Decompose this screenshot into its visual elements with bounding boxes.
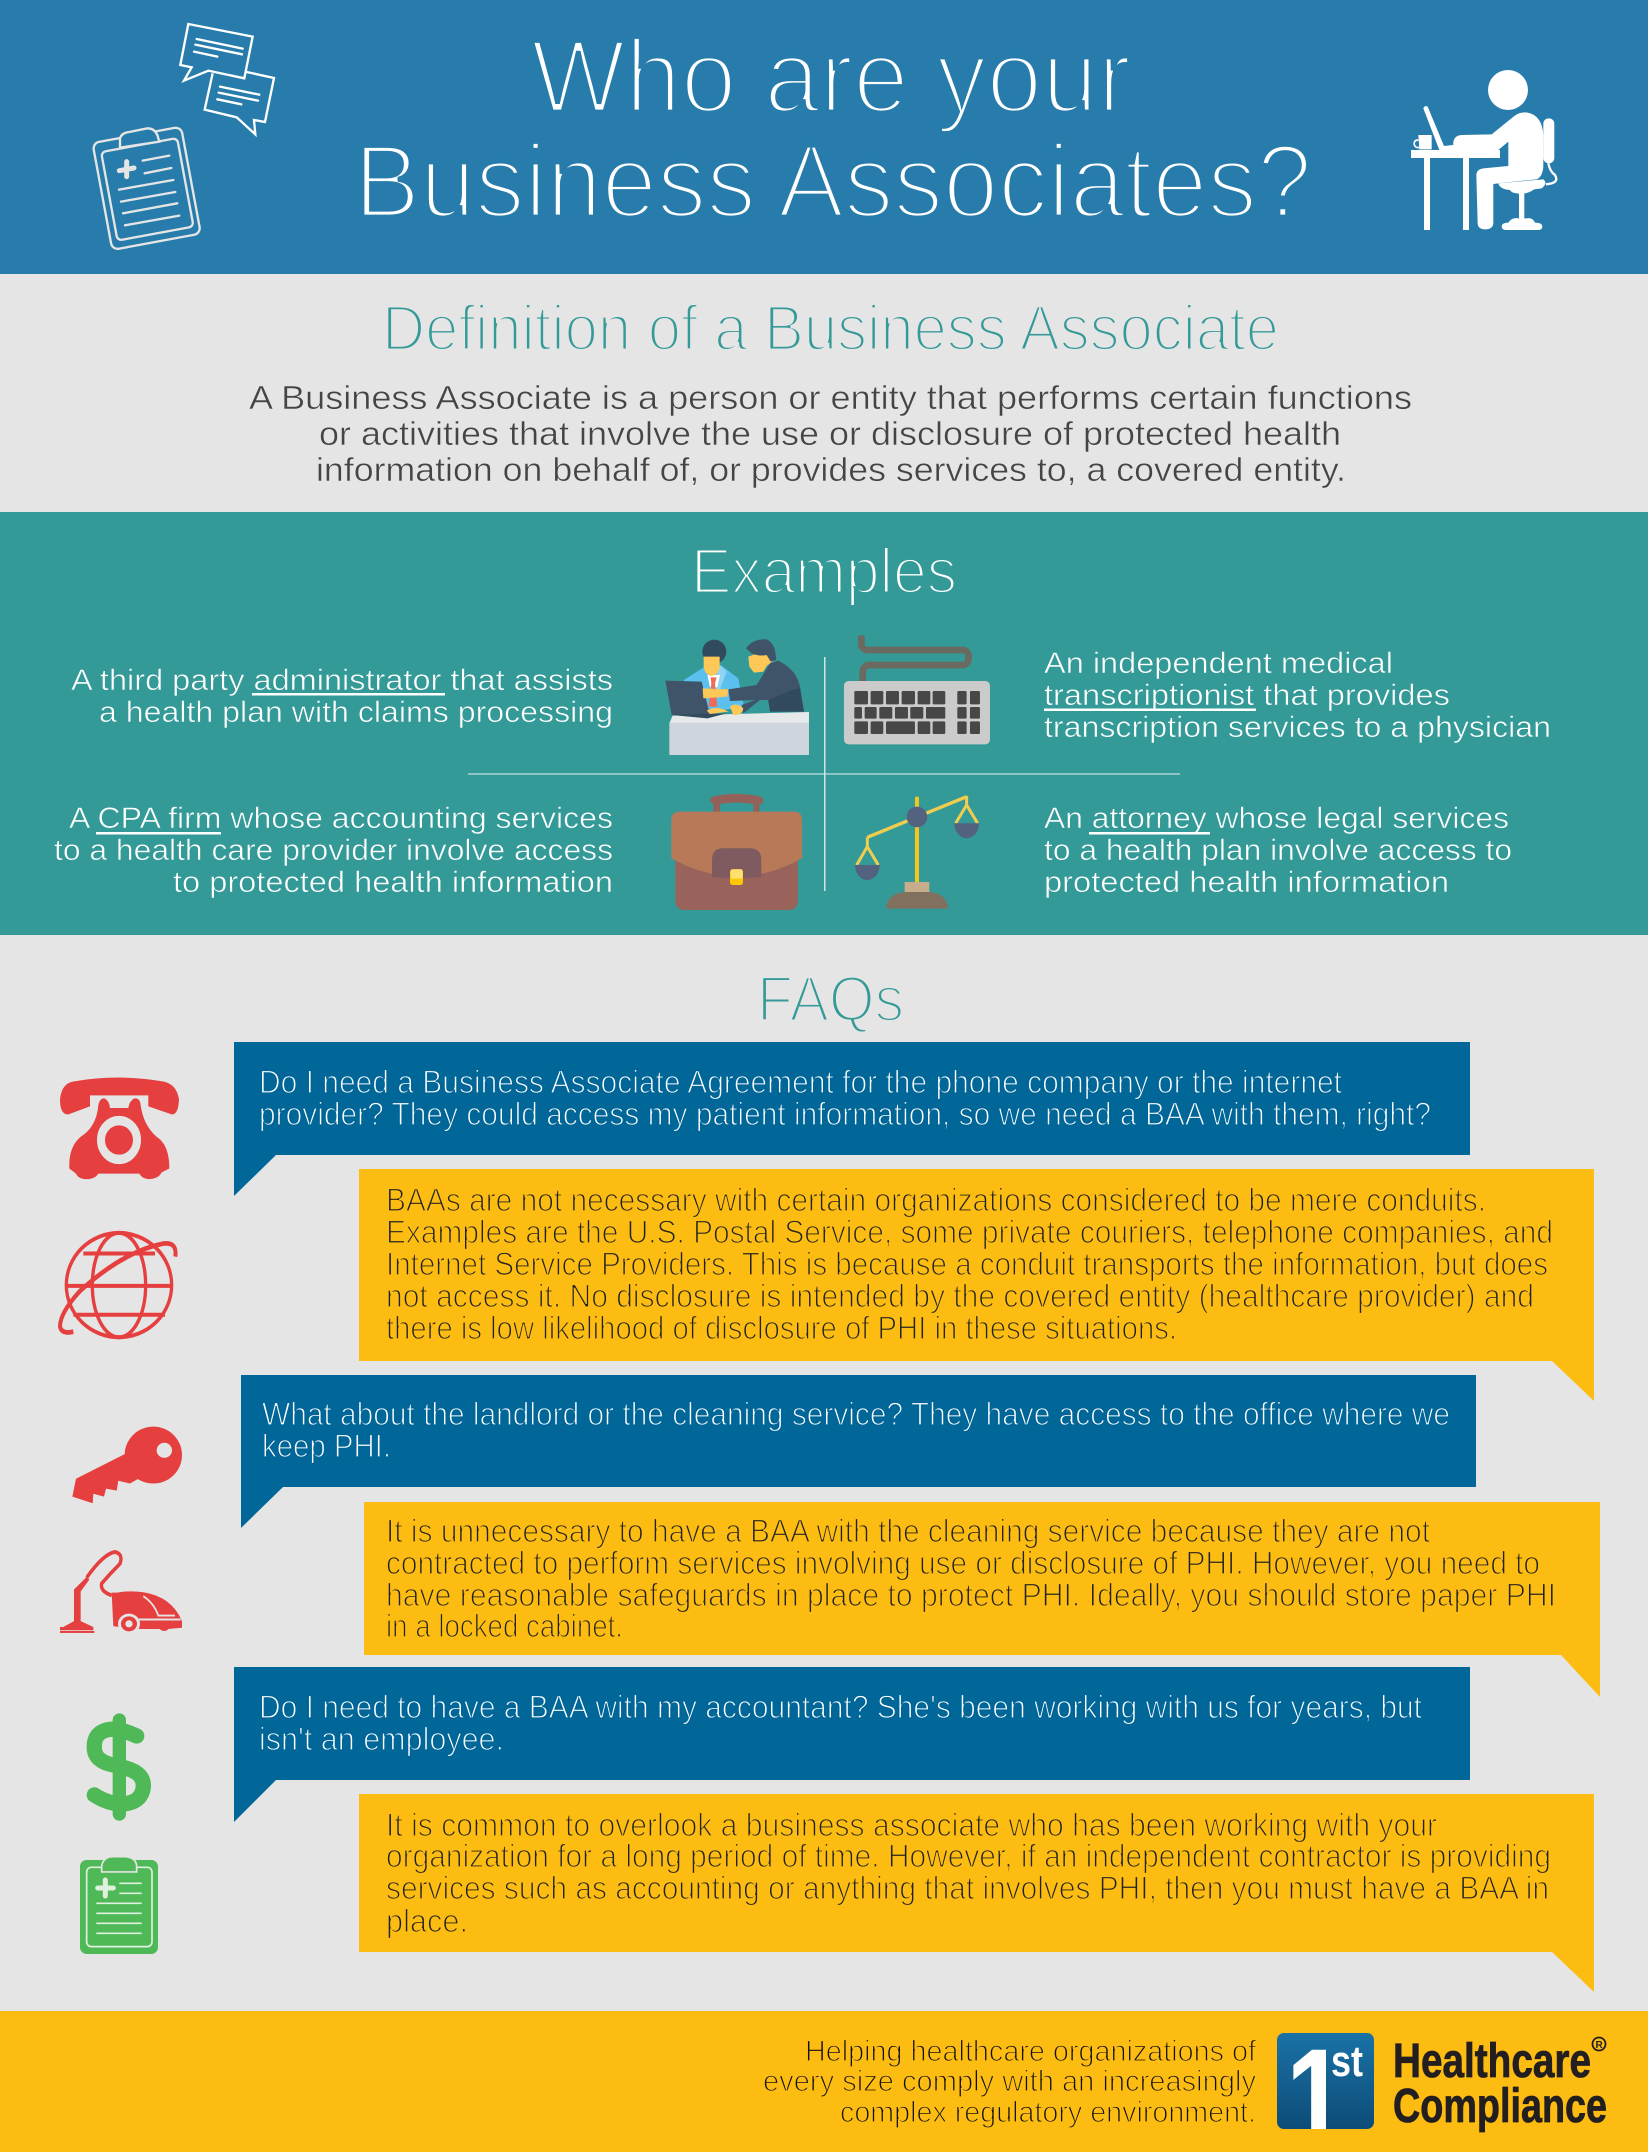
heading: definition: Definition of a Business Associate [382,292,1279,364]
icon: globe [60,1233,176,1337]
heading: FAQs: FAQs [757,963,904,1035]
title: Business Associates? [354,124,1312,240]
example text: attorney: An attorney whose legal services [1044,802,1509,835]
icon: telephone [60,1078,179,1179]
answer bubble 1: Internet Service Providers. This is because a conduit transports the information, but does [386,1246,1548,1282]
example text: transcriptionist: An independent medical [1044,647,1393,680]
example text: transcriptionist [1044,647,1551,744]
answer bubble 3 [359,1794,1594,1992]
footer tagline: complex regulatory environment. [840,2096,1256,2129]
icon: speech bubbles [180,24,274,134]
panel: footer [0,2011,1648,2152]
footer tagline [763,2035,1257,2129]
answer bubble 3: It is common to overlook a business associate who has been working with your [386,1807,1437,1843]
logo: 1st Healthcare Compliance [1277,2033,1606,2132]
question bubble 1: provider? They could access my patient information, so we need a BAA with them, right? [259,1096,1431,1132]
definition text: or activities that involve the use or disclosure of protected health [319,415,1341,452]
question bubble 1: Do I need a Business Associate Agreement for the phone company or the internet [259,1064,1342,1100]
panel: definition [0,274,1648,512]
icon: keyboard [844,635,990,744]
heading: examples: Examples [691,535,957,607]
example text: attorney: protected health information [1044,866,1449,899]
answer bubble 2 [364,1502,1600,1697]
question bubble 3: Do I need to have a BAA with my accountant? She's been working with us for years, but [259,1689,1422,1725]
panel: header [0,0,1648,274]
question bubble 3: isn't an employee. [259,1721,504,1757]
example text: CPA firm: A CPA firm whose accounting services [69,802,613,835]
logo: 1st Healthcare Compliance: R [1596,2040,1604,2051]
question bubble 2: What about the landlord or the cleaning service? They have access to the office where we [262,1396,1450,1432]
answer bubble 1: there is low likelihood of disclosure of PHI in these situations. [386,1310,1177,1346]
example text: administrator: A third party administrator that assists [71,664,613,697]
example text: administrator [71,664,613,729]
example text: administrator: a health plan with claims processing [99,696,613,729]
question bubble 1 [234,1042,1470,1196]
logo: 1st Healthcare Compliance: st [1331,2037,1363,2086]
answer bubble 2: contracted to perform services involving use or disclosure of PHI. However, you need to [386,1545,1540,1581]
example text: CPA firm: to protected health information [173,866,613,899]
question bubble 2: keep PHI. [262,1428,391,1464]
footer tagline: Helping healthcare organizations of [805,2035,1257,2068]
icon: briefcase [671,794,802,910]
definition text: information on behalf of, or provides services to, a covered entity. [316,451,1346,488]
example text: transcriptionist: transcription services to a physician [1044,711,1551,744]
icon: scales of justice [855,796,979,909]
definition text [249,379,1412,488]
answer bubble 3: place. [386,1903,468,1939]
answer bubble 2: in a locked cabinet. [386,1608,623,1644]
footer tagline: every size comply with an increasingly [763,2065,1256,2098]
icon: green clipboard [80,1857,158,1954]
title [354,19,1312,240]
definition text: A Business Associate is a person or entity that performs certain functions [249,379,1412,416]
answer bubble 2: have reasonable safeguards in place to protect PHI. Ideally, you should store paper PHI [386,1577,1556,1613]
panel: FAQs [0,935,1648,2011]
icon: clipboard [93,127,201,250]
example text: attorney: to a health plan involve access to [1044,834,1512,867]
logo: 1st Healthcare Compliance: Healthcare [1393,2035,1591,2088]
panel: examples [0,512,1648,935]
icon: person at desk [1411,70,1556,230]
example text: CPA firm: to a health care provider involve access [54,834,613,867]
title: Who are your [531,19,1131,135]
answer bubble 1: not access it. No disclosure is intended by the covered entity (healthcare provider) and [386,1278,1534,1314]
example text: attorney [1044,802,1512,899]
example text: transcriptionist: transcriptionist that provides [1044,679,1450,712]
example text: CPA firm [54,802,613,899]
icon: business people at desk [665,639,809,755]
answer bubble 1 [359,1169,1594,1401]
question bubble 3 [234,1667,1470,1822]
answer bubble 3: organization for a long period of time. However, if an independent contractor is providing [386,1838,1551,1874]
question bubble 2 [241,1375,1476,1528]
answer bubble 3: services such as accounting or anything that involves PHI, then you must have a BAA in [386,1870,1549,1906]
answer bubble 1: Examples are the U.S. Postal Service, some private couriers, telephone companies, and [386,1214,1553,1250]
answer bubble 2: It is unnecessary to have a BAA with the cleaning service because they are not [386,1513,1430,1549]
answer bubble 1: BAAs are not necessary with certain organizations considered to be mere conduits. [386,1182,1486,1218]
icon: dollar sign [94,1720,143,1814]
icon: key [72,1427,182,1503]
icon: vacuum cleaner [60,1552,182,1634]
